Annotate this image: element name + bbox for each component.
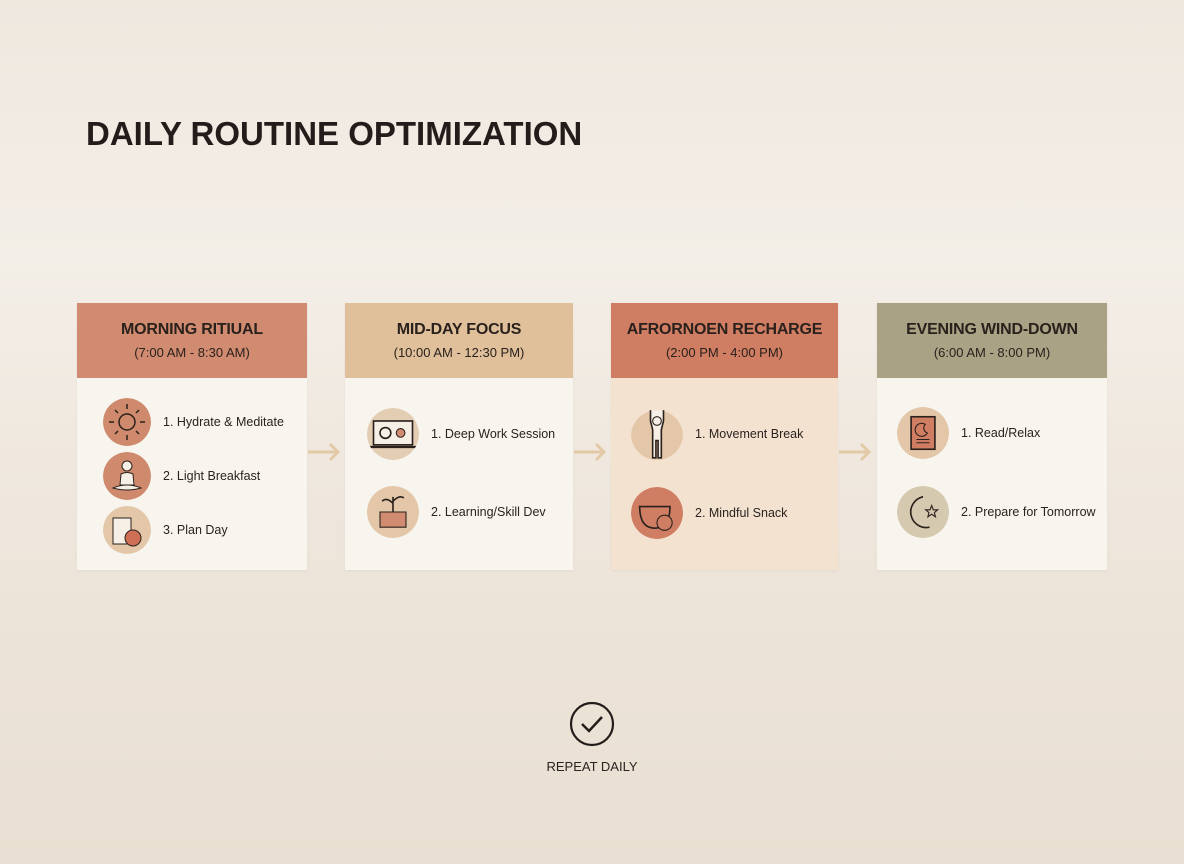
header: afternoon: (2:00 PM - 4:00 PM) (666, 345, 783, 360)
item: learning (367, 486, 546, 538)
item: hydrate: 1. Hydrate & Meditate (163, 415, 284, 429)
item: deep work (367, 408, 555, 460)
header: morning: MORNING RITIUAL (121, 321, 263, 338)
title: DAILY ROUTINE OPTIMIZATION (86, 115, 582, 152)
panel: mid-day focus (345, 303, 573, 570)
icon: repeat check (570, 702, 614, 746)
panel: morning ritual (77, 303, 307, 570)
label: repeat daily: REPEAT DAILY (546, 759, 638, 774)
item: snack: 2. Mindful Snack (695, 506, 787, 520)
arrow 2 (574, 443, 606, 461)
item: read: 1. Read/Relax (961, 426, 1040, 440)
header: evening (877, 303, 1107, 378)
item: hydrate (103, 398, 284, 446)
header: mid-day (345, 303, 573, 378)
panel: afternoon recharge (611, 303, 838, 570)
item: plan day: 3. Plan Day (163, 523, 228, 537)
arrow 1 (308, 443, 340, 461)
item: movement: 1. Movement Break (695, 427, 803, 441)
item: prepare: 2. Prepare for Tomorrow (961, 505, 1096, 519)
header: morning: (7:00 AM - 8:30 AM) (134, 345, 250, 360)
header: evening: EVENING WIND-DOWN (906, 321, 1078, 338)
header: afternoon (611, 303, 838, 378)
arrow 3 (839, 443, 871, 461)
item: prepare (897, 486, 1096, 538)
header: mid-day: MID-DAY FOCUS (397, 321, 521, 338)
panel: evening wind-down (877, 303, 1107, 570)
header: evening: (6:00 AM - 8:00 PM) (934, 345, 1050, 360)
header: afternoon: AFRORNOEN RECHARGE (627, 321, 822, 338)
item: read (897, 407, 1040, 459)
header: morning (77, 303, 307, 378)
item: movement (631, 410, 804, 460)
item: snack (631, 487, 788, 539)
item: breakfast (103, 452, 260, 500)
item: learning: 2. Learning/Skill Dev (431, 505, 546, 519)
item: plan day (103, 506, 228, 554)
item: breakfast: 2. Light Breakfast (163, 469, 260, 483)
header: mid-day: (10:00 AM - 12:30 PM) (394, 345, 524, 360)
item: deep work: 1. Deep Work Session (431, 427, 555, 441)
